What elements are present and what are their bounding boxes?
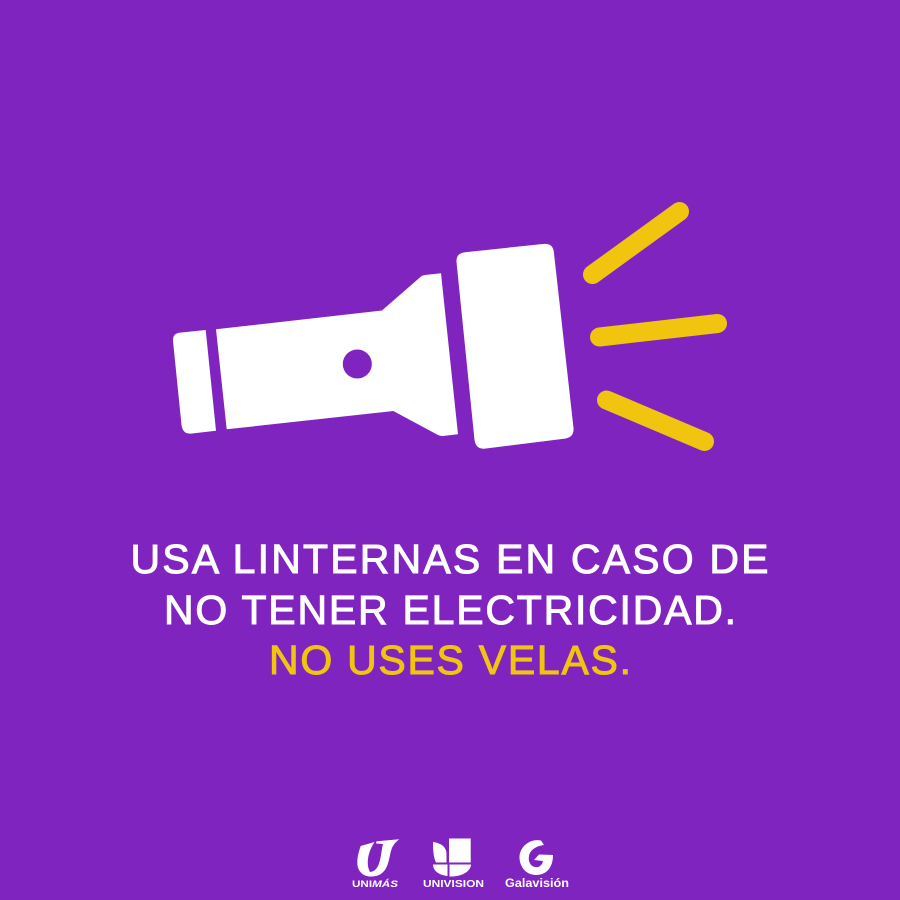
- logo: Galavisión: Galavisión: [505, 876, 569, 890]
- line 3: NO USES VELAS.: [269, 637, 631, 683]
- icon: light rays: [592, 212, 718, 442]
- lower ray: [606, 400, 704, 442]
- logos row: [352, 838, 569, 890]
- flashlight body: [216, 273, 458, 436]
- flashlight head: [456, 244, 574, 449]
- upper ray: [592, 212, 680, 274]
- logo: UniMás: UNI MÁS: [352, 879, 399, 890]
- flashlight tail cap: [173, 330, 216, 434]
- headline text: [130, 536, 768, 683]
- logo: Univision: [423, 838, 484, 890]
- logo: UniMás: [352, 839, 399, 890]
- line 2: NO TENER ELECTRICIDAD.: [164, 587, 736, 633]
- icon: flashlight: [173, 244, 574, 449]
- logo: Univision: UNIVISION: [423, 879, 484, 890]
- line 1: USA LINTERNAS EN CASO DE: [130, 536, 768, 582]
- middle ray: [600, 324, 718, 337]
- logo: Galavisión: [505, 840, 569, 890]
